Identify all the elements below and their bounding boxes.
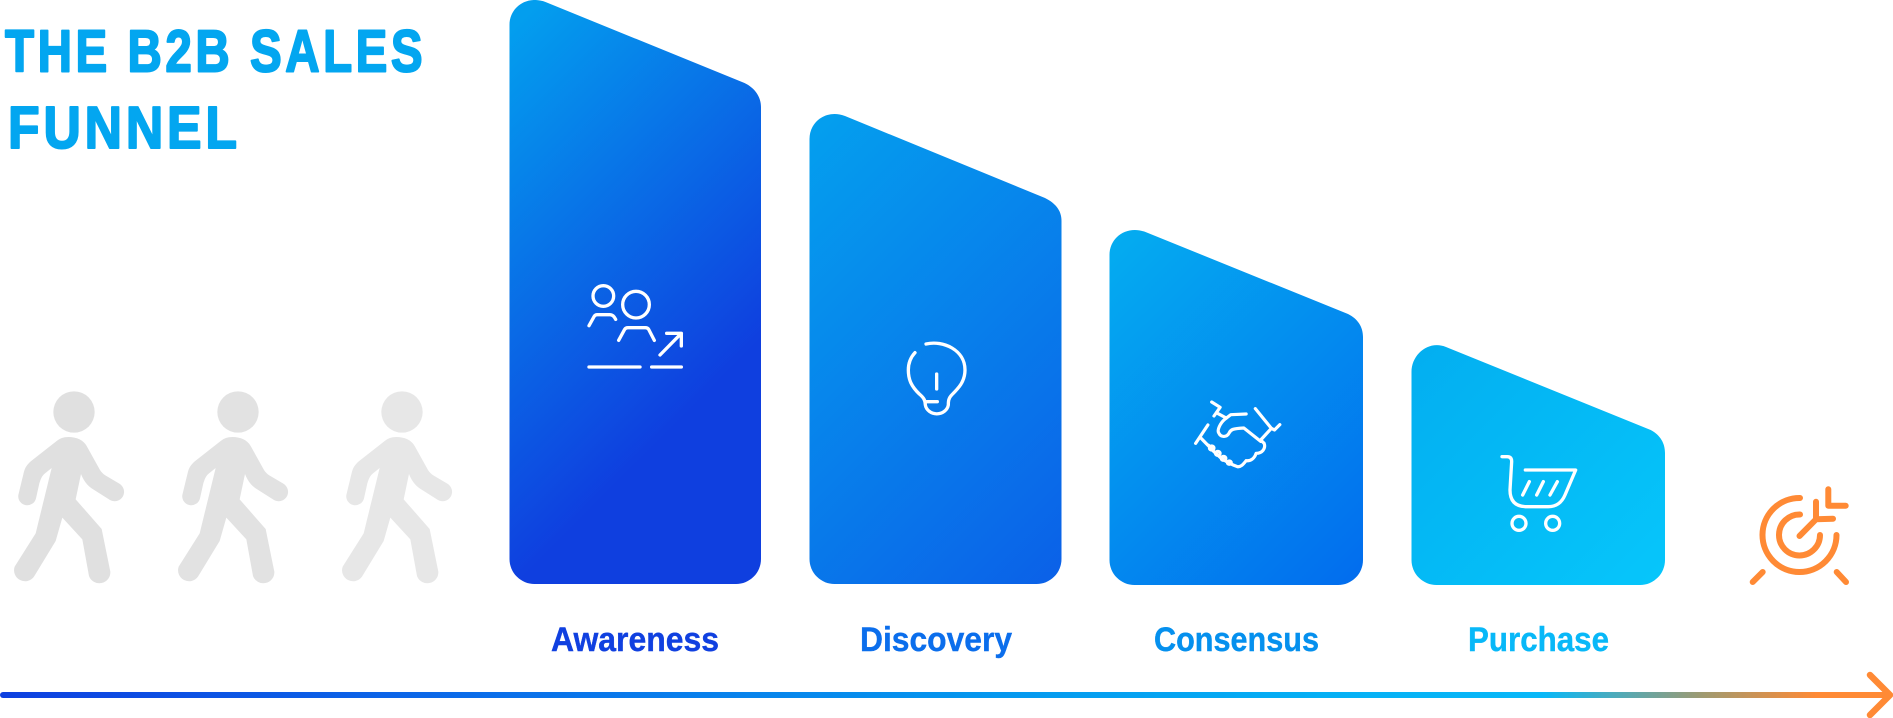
title xyxy=(5,18,426,161)
arrow: timeline xyxy=(0,675,1890,715)
person 2 xyxy=(178,391,288,583)
label: awareness: Awareness xyxy=(551,621,719,659)
icon: handshake xyxy=(1196,402,1280,467)
label: consensus: Consensus xyxy=(1154,621,1319,659)
panel: discovery xyxy=(810,114,1062,584)
panel: purchase xyxy=(1412,345,1665,585)
icon: shopping cart xyxy=(1502,457,1576,530)
title: FUNNEL xyxy=(8,95,241,161)
icon: target xyxy=(1753,489,1846,582)
panel: consensus xyxy=(1110,230,1363,585)
label: discovery: Discovery xyxy=(860,621,1012,659)
walking people xyxy=(14,391,452,583)
label: purchase: Purchase xyxy=(1468,621,1609,659)
icon: light bulb xyxy=(908,343,965,414)
icon: audience growth xyxy=(589,286,681,367)
person 1 xyxy=(14,391,124,583)
panel: awareness xyxy=(510,0,761,584)
person 3 xyxy=(342,391,452,583)
title: THE B2B SALES xyxy=(5,18,426,85)
